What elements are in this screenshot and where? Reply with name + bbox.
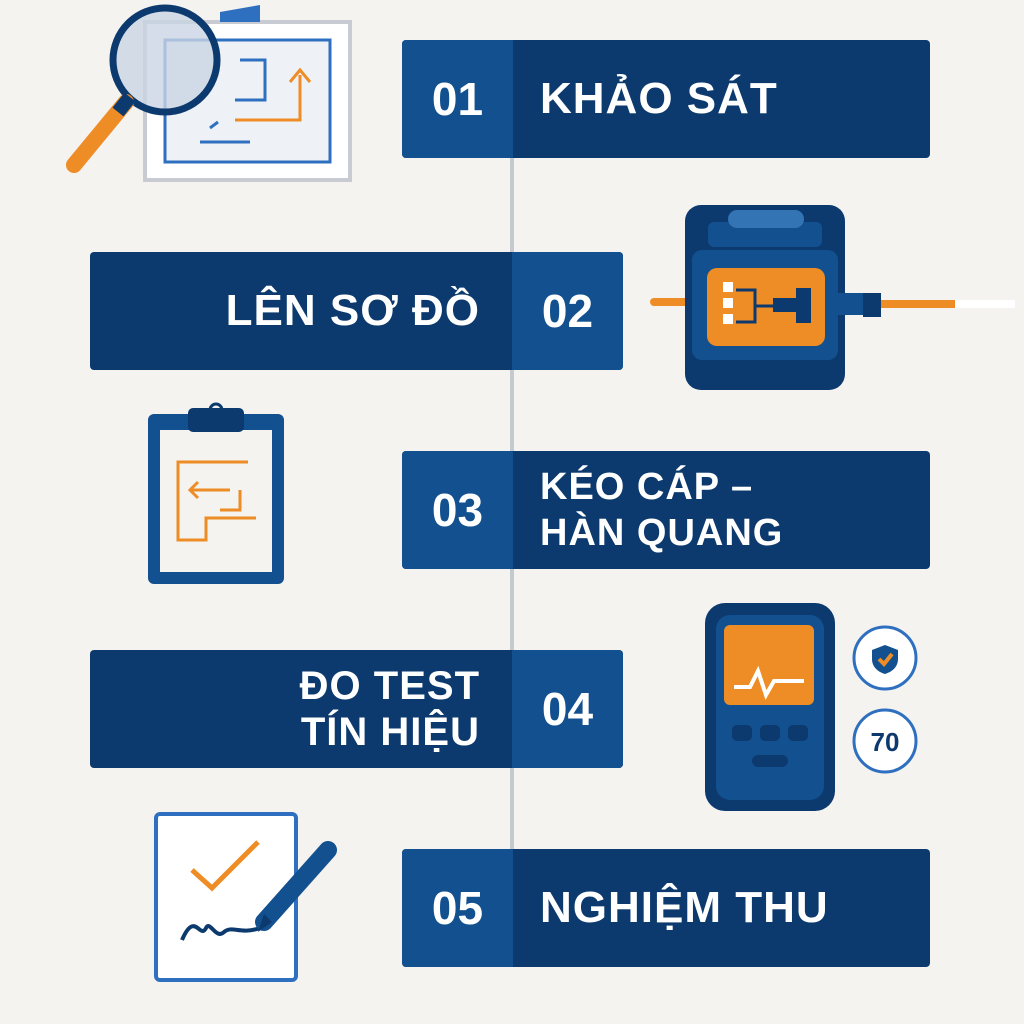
step 3 bar xyxy=(402,451,930,569)
label 01: KHẢO SÁT xyxy=(540,74,778,123)
number 01 xyxy=(402,40,513,158)
step 2 bar xyxy=(90,252,623,370)
number 05: 05 xyxy=(432,882,483,934)
label 04: TÍN HIỆU xyxy=(301,710,480,754)
icon: clipboard xyxy=(148,402,284,584)
label 04 xyxy=(300,664,480,754)
number 02: 02 xyxy=(542,285,593,337)
step 1 bar xyxy=(402,40,930,158)
label 03 xyxy=(540,465,783,554)
number 04: 04 xyxy=(542,683,593,735)
icon: shield badge xyxy=(852,626,918,690)
number 03 xyxy=(402,451,513,569)
icon: magnifier over blueprint xyxy=(66,4,352,182)
icon: 70 badge: 70 xyxy=(871,727,899,757)
icon: 70 badge xyxy=(852,708,918,774)
icon: signed document xyxy=(154,812,337,982)
label 03: KÉO CÁP – xyxy=(540,466,753,508)
number 04 xyxy=(512,650,623,768)
icon: fusion splicer xyxy=(650,205,1015,390)
number 03: 03 xyxy=(432,484,483,536)
number 01: 01 xyxy=(432,73,483,125)
step 5 bar xyxy=(402,849,930,967)
label 02: LÊN SƠ ĐỒ xyxy=(226,286,480,335)
label 05: NGHIỆM THU xyxy=(540,883,829,932)
number 02 xyxy=(512,252,623,370)
icon: OTDR meter xyxy=(705,603,835,811)
timeline line xyxy=(510,150,514,860)
step 4 bar xyxy=(90,650,623,768)
label 04: ĐO TEST xyxy=(300,664,480,708)
label 03: HÀN QUANG xyxy=(540,512,783,554)
number 05 xyxy=(402,849,513,967)
